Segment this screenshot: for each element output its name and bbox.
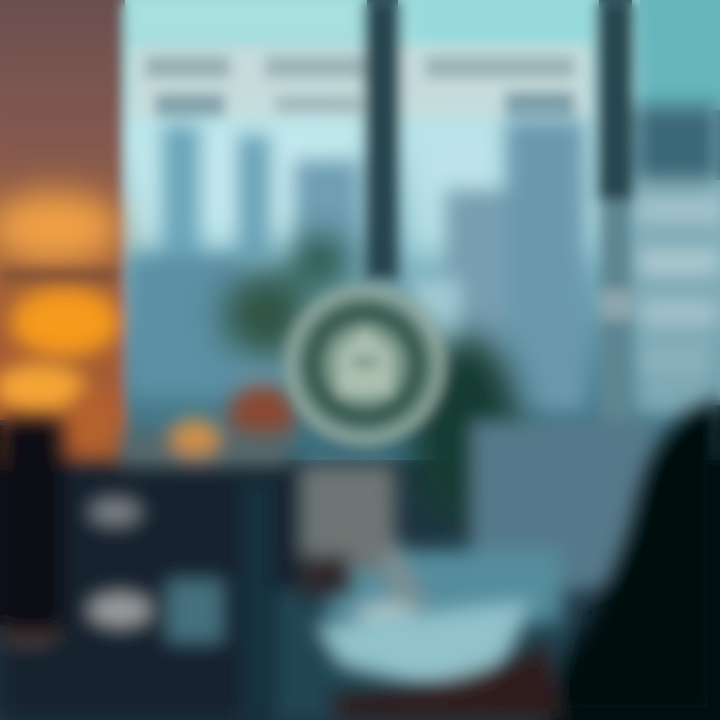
seated figure / grey chair [300, 465, 430, 636]
tower columns [130, 120, 585, 410]
right side distant building [635, 105, 720, 415]
dark chair at left [0, 418, 274, 720]
window upper band [130, 46, 590, 120]
plants [223, 234, 520, 525]
red plant pot [228, 385, 296, 445]
window background [115, 0, 720, 460]
left wall with warm lamp glow [0, 0, 124, 470]
desk and table items [0, 420, 290, 646]
city towers [130, 125, 595, 255]
open notebook [315, 600, 530, 705]
window mullions [365, 0, 634, 430]
hand in foreground [330, 640, 565, 720]
dark foreground silhouette [545, 398, 720, 720]
dark lower room background [0, 420, 660, 720]
icon: house glyph [338, 328, 392, 395]
circular badge icon [287, 287, 443, 443]
